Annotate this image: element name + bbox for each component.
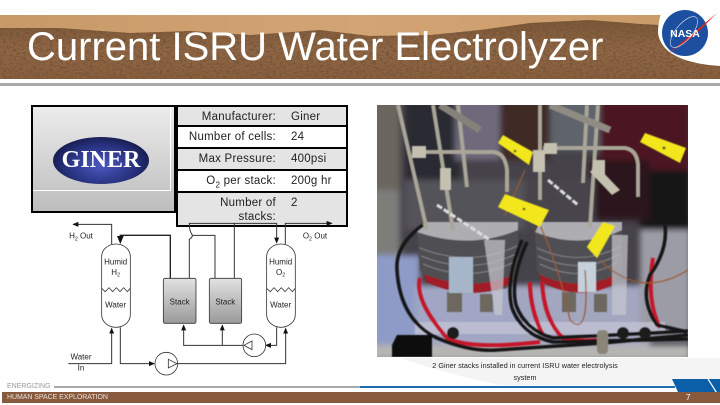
row: oxygen per stack: 200g hr bbox=[291, 175, 332, 187]
row: manufacturer: Giner bbox=[291, 111, 320, 123]
row: oxygen per stack bbox=[176, 169, 348, 193]
row: number of stacks: Number of stacks: bbox=[220, 197, 276, 223]
row: number of cells: Number of cells: bbox=[189, 131, 276, 143]
icon: Giner oval logo: GINER bbox=[62, 147, 140, 173]
footer text: energizing: ENERGIZING bbox=[7, 383, 51, 390]
photo background bbox=[370, 100, 690, 360]
stack 2 bbox=[209, 278, 242, 323]
brown thermocouple wires bbox=[505, 170, 688, 324]
vessel: humid oxygen bbox=[267, 244, 295, 327]
diagram labels: H bbox=[111, 268, 117, 277]
row: max pressure bbox=[176, 147, 348, 171]
diagram labels: Stack bbox=[215, 298, 235, 307]
connector and clamps bbox=[392, 335, 432, 357]
pump 1 bbox=[155, 352, 178, 375]
icon: Giner oval logo bbox=[53, 137, 149, 184]
caption bbox=[432, 361, 618, 382]
diagram labels: Water bbox=[105, 300, 126, 309]
diagram labels: Water bbox=[70, 353, 92, 362]
diagram labels bbox=[69, 232, 328, 373]
pipes bbox=[68, 223, 332, 364]
stack 1 bbox=[163, 278, 196, 323]
icon: NASA logo: NASA bbox=[670, 28, 700, 40]
row: number of stacks: 2 bbox=[291, 197, 298, 209]
clear acrylic brackets bbox=[415, 235, 665, 334]
row: number of stacks bbox=[176, 191, 348, 227]
row: max pressure: 400psi bbox=[291, 153, 326, 165]
diagram labels: Water bbox=[270, 300, 291, 309]
panel: Giner logo bbox=[31, 105, 176, 213]
diagram labels: Humid bbox=[269, 257, 292, 266]
row: oxygen per stack: O2 per stack: bbox=[206, 175, 276, 189]
diagram labels: In bbox=[78, 364, 84, 373]
diagram labels: H bbox=[69, 232, 75, 241]
row: number of cells bbox=[176, 125, 348, 149]
caption: 2 Giner stacks installed in current ISRU water electrolysis bbox=[432, 361, 618, 370]
icon: NASA logo bbox=[658, 10, 720, 66]
red power wires bbox=[419, 258, 660, 345]
left stack bbox=[417, 222, 518, 312]
yellow sensor blocks bbox=[498, 133, 686, 258]
photo: two Giner stacks installed in the system bbox=[377, 105, 688, 357]
diagram labels: O bbox=[303, 232, 309, 241]
diagram labels: 2 bbox=[309, 236, 312, 242]
page number: 7 bbox=[686, 393, 690, 402]
pump 2 bbox=[243, 334, 266, 357]
diagram labels: 2 bbox=[75, 236, 78, 242]
vessel: humid hydrogen bbox=[102, 244, 130, 327]
diagram labels: Out bbox=[78, 232, 94, 241]
diagram labels: Out bbox=[312, 232, 328, 241]
header banner: Mars landscape bbox=[0, 15, 720, 86]
footer text: human space exploration: HUMAN SPACE EXPLORATION bbox=[7, 394, 108, 401]
panel: specifications table bbox=[176, 105, 348, 227]
caption: system bbox=[513, 373, 537, 382]
label stripes bbox=[437, 180, 578, 240]
row: manufacturer: Manufacturer: bbox=[202, 111, 276, 123]
steel pipes bbox=[398, 105, 638, 230]
black wires bbox=[397, 225, 688, 350]
diagram labels: O bbox=[276, 268, 282, 277]
row: number of cells: 24 bbox=[291, 131, 304, 143]
right stack bbox=[535, 222, 622, 312]
diagram labels: 2 bbox=[282, 273, 285, 279]
diagram labels: 2 bbox=[117, 273, 120, 279]
diagram labels: Humid bbox=[104, 257, 127, 266]
diagram labels: Stack bbox=[170, 298, 190, 307]
row: manufacturer bbox=[176, 105, 348, 127]
title: Current ISRU Water Electrolyzer bbox=[27, 25, 603, 69]
row: max pressure: Max Pressure: bbox=[199, 153, 276, 165]
